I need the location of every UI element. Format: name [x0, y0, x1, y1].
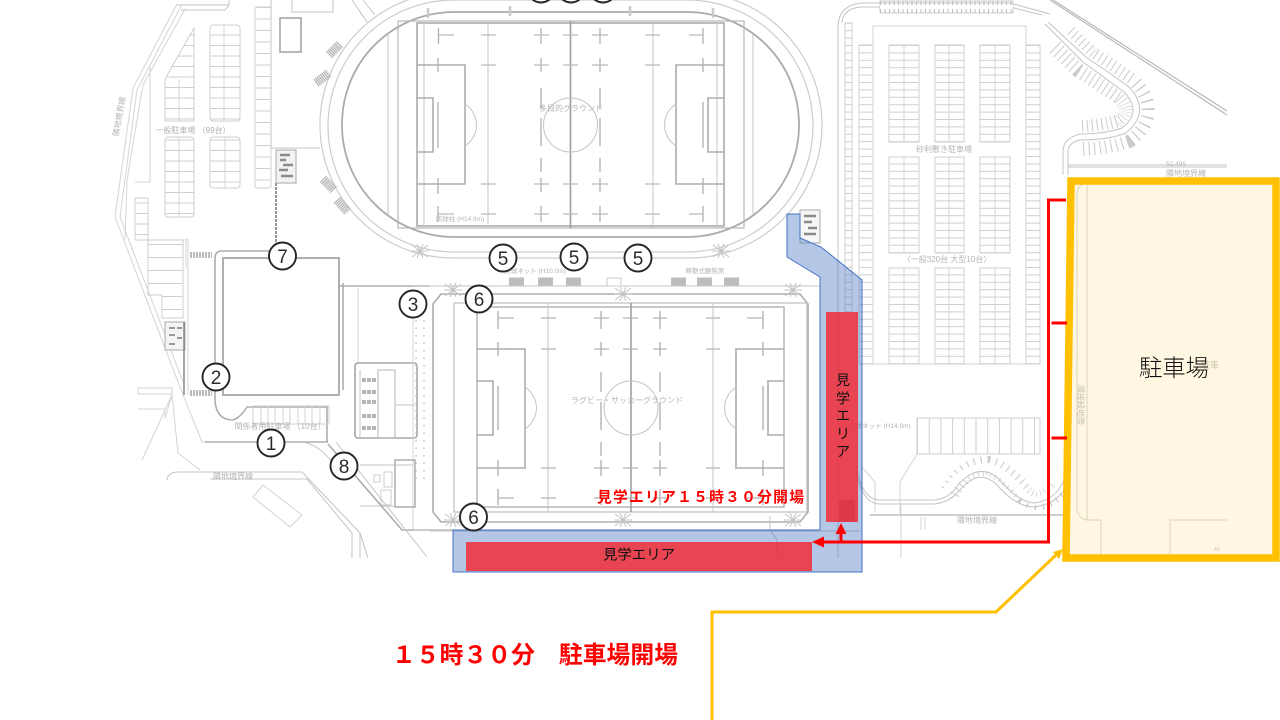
marker 6 upper: 6 [474, 290, 484, 311]
marker 5 right [624, 244, 652, 272]
wavy road and south boundary: 隣地境界線 [957, 515, 997, 525]
left parking lot: 隣地境界線 [111, 96, 127, 137]
marker 3: 3 [408, 295, 418, 316]
upper multipurpose ground with track [316, 0, 822, 258]
marker 1: 1 [266, 434, 276, 455]
lower rugby and soccer ground: ラグビー・サッカーグラウンド [571, 395, 683, 405]
site map base drawing [111, 0, 1227, 558]
ramp and perimeter roads north east [880, 0, 1227, 178]
panel: parking area (yellow frame): A5 [1214, 547, 1220, 553]
marker 5 left [490, 244, 516, 272]
ramp and perimeter roads north east: 隣地境界線 [1166, 168, 1206, 178]
marker 3 [400, 290, 426, 318]
marker 5 centre [560, 244, 588, 270]
sports hall and facility buildings [165, 0, 430, 530]
arrow: callout leader to parking [712, 549, 1063, 720]
label: viewing area vertical: エ [836, 408, 850, 424]
viewing area opening time note: 見学エリア１５時３０分開場 [597, 488, 804, 506]
gravel parking lot: 砂利敷き駐車場 [916, 144, 972, 154]
numbered markers [202, 0, 652, 530]
left parking lot: 一般駐車場 （99台） [155, 125, 231, 135]
lower rugby and soccer ground: 防球ネット (H10.0m) [504, 266, 566, 275]
lower rugby and soccer ground [414, 266, 860, 558]
panel: parking area (yellow frame): 隣接緑地帯 [1076, 385, 1086, 425]
left parking lot [112, 0, 272, 442]
label: viewing area vertical: 学 [836, 390, 850, 406]
sports hall and facility buildings: 関係者用駐車場 （10台） [234, 421, 326, 431]
marker 6 lower [460, 504, 487, 530]
perimeter roads south west [138, 388, 453, 558]
marker 6 upper [466, 286, 492, 312]
marker 6 lower: 6 [468, 508, 479, 529]
marker 2 [202, 364, 230, 390]
arrow: route from parking to viewing area [812, 200, 1067, 548]
gravel parking lot: （一般320台 大型10台） [903, 254, 991, 264]
viewing zone outline (blue) [453, 214, 862, 572]
marker 5 left: 5 [498, 249, 508, 270]
marker 7: 7 [277, 247, 288, 268]
label: viewing area vertical: 見 [836, 372, 850, 388]
marker 8: 8 [339, 457, 349, 478]
parking opening time heading: １５時３０分 駐車場開場 [392, 642, 678, 669]
label: viewing area vertical: ア [836, 444, 850, 460]
label: viewing area vertical: リ [836, 426, 850, 442]
label: viewing area horizontal: 見学エリア [603, 546, 675, 564]
upper multipurpose ground with track: 防球柱 (H14.9m) [436, 214, 484, 223]
ramp and perimeter roads north east: 52.495 [1166, 161, 1186, 168]
gravel parking lot [800, 3, 1050, 558]
gravel parking lot: 防球ネット (H14.9m) [849, 421, 911, 430]
panel: parking area (yellow frame): 駐車 [1201, 359, 1219, 370]
lower rugby and soccer ground: 移動式観覧席 [686, 266, 725, 275]
viewing area south (red) [466, 542, 812, 571]
panel: parking area (yellow frame) [1066, 181, 1276, 558]
marker 7 [269, 242, 296, 270]
marker 5 right: 5 [633, 249, 643, 270]
marker 8 [330, 452, 358, 480]
marker 2: 2 [211, 368, 221, 389]
label: parking: 駐車場 [1139, 355, 1209, 381]
cropped markers at top edge [528, 0, 616, 2]
perimeter roads south west: 隣地境界線 [213, 471, 253, 481]
wavy road and south boundary [856, 460, 1068, 558]
upper multipurpose ground with track: 多目的グラウンド [539, 103, 603, 113]
viewing area east (red) [826, 312, 858, 522]
marker 1 [258, 430, 284, 456]
marker 5 centre: 5 [569, 248, 579, 269]
